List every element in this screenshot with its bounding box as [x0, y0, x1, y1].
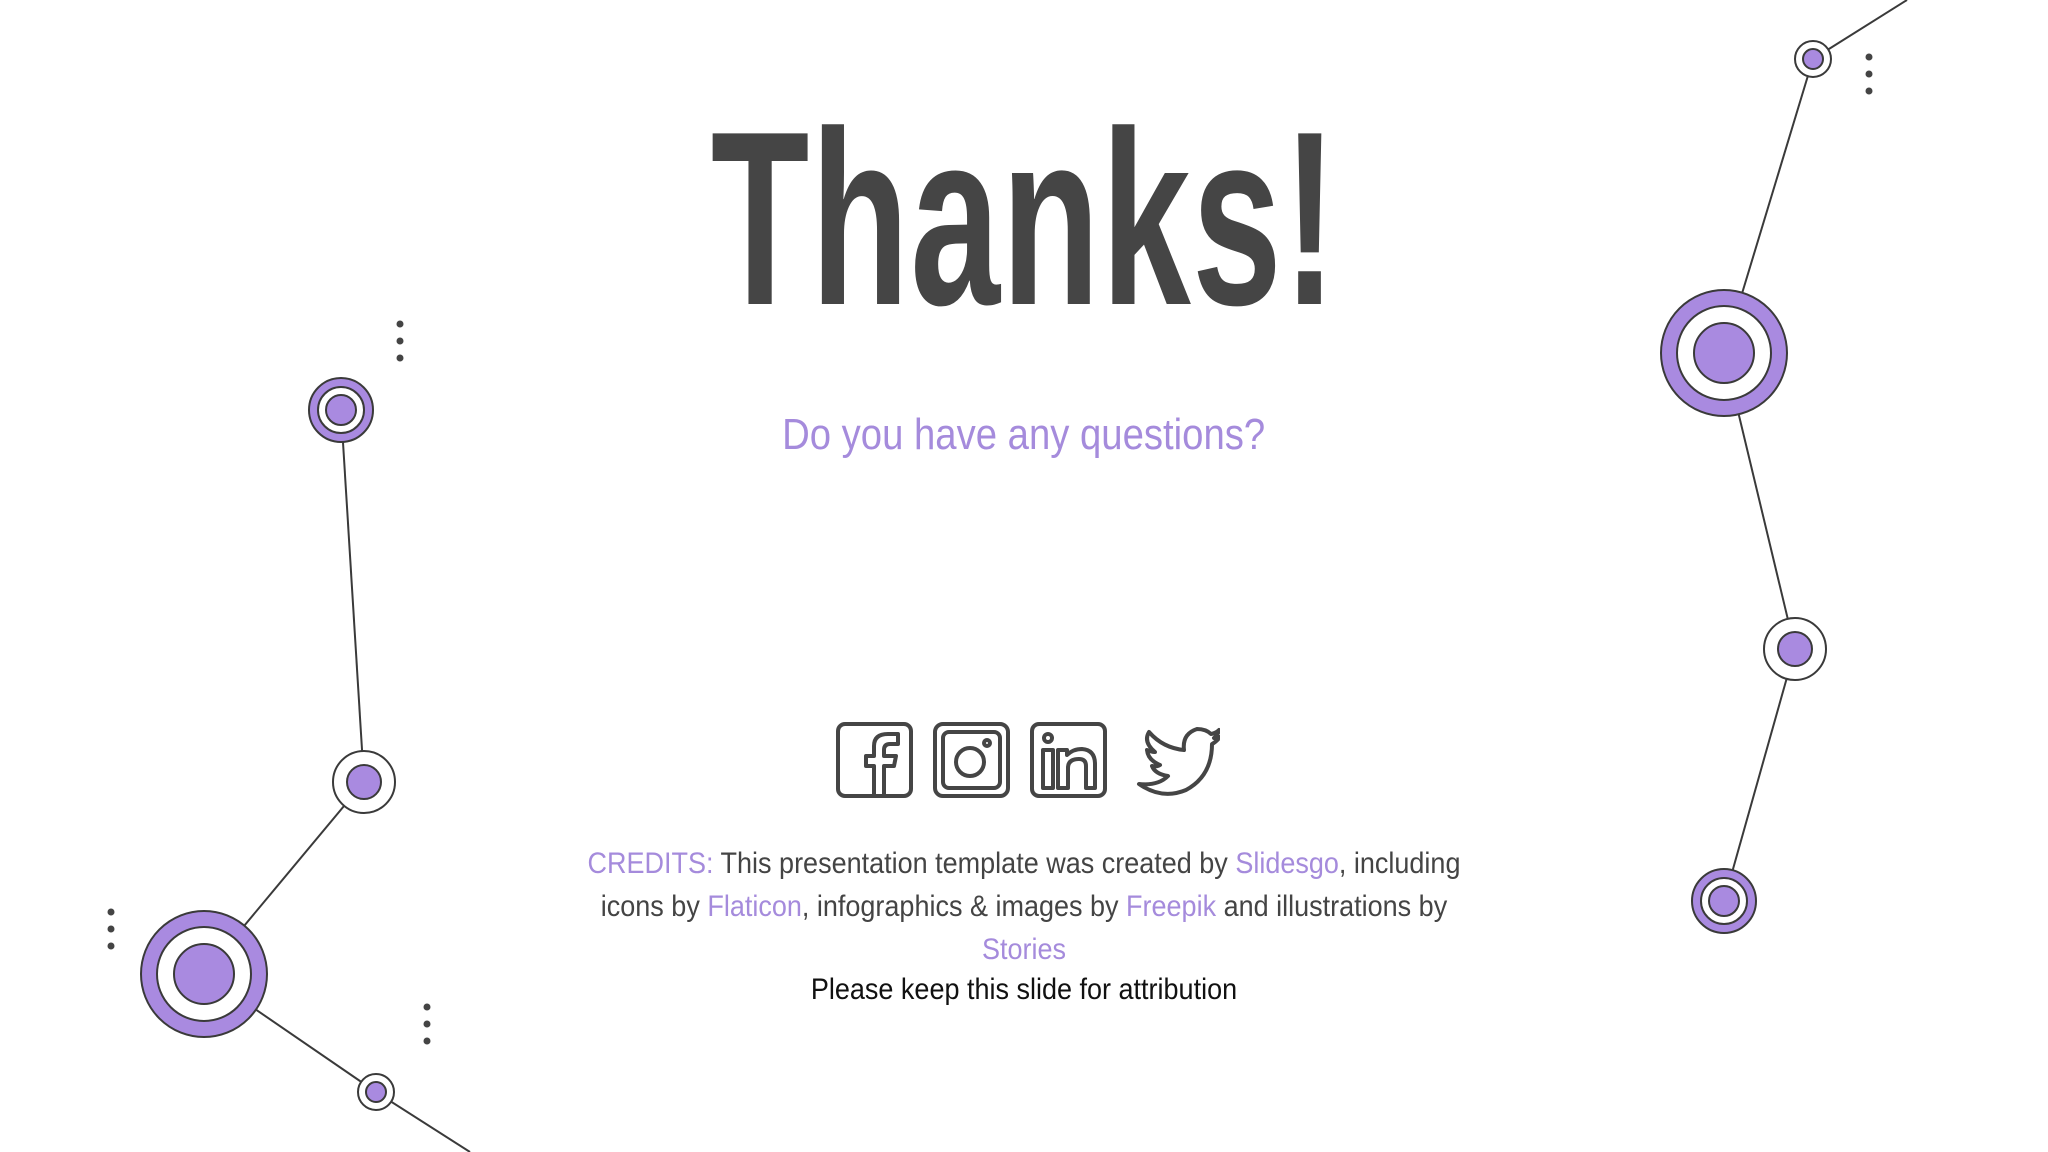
- node: right big: [1661, 290, 1787, 416]
- credits text: Please keep this slide for attribution: [811, 973, 1237, 1006]
- node: left top: [309, 378, 373, 442]
- dots: [108, 54, 1872, 1044]
- credits text: Stories: [982, 933, 1066, 966]
- node: left big: [141, 911, 267, 1037]
- icon: instagram: [935, 724, 1008, 796]
- icon: linkedin: [1032, 724, 1105, 796]
- icon: twitter: [1139, 729, 1220, 794]
- node: right middle: [1764, 618, 1826, 680]
- credits text: CREDITS: This presentation template was created by Slidesgo, including: [588, 847, 1460, 880]
- node: right top: [1795, 41, 1831, 77]
- node: right bottom: [1692, 869, 1756, 933]
- icon: facebook: [838, 724, 911, 796]
- subtitle: Do you have any questions?: [782, 410, 1266, 459]
- social icons: [836, 722, 1220, 798]
- title: Thanks!: [710, 79, 1338, 357]
- credits text: [588, 847, 1460, 1006]
- credits text: icons by Flaticon, infographics & images by Freepik and illustrations by: [601, 890, 1447, 923]
- node: left bottom: [358, 1074, 394, 1110]
- node: left middle: [333, 751, 395, 813]
